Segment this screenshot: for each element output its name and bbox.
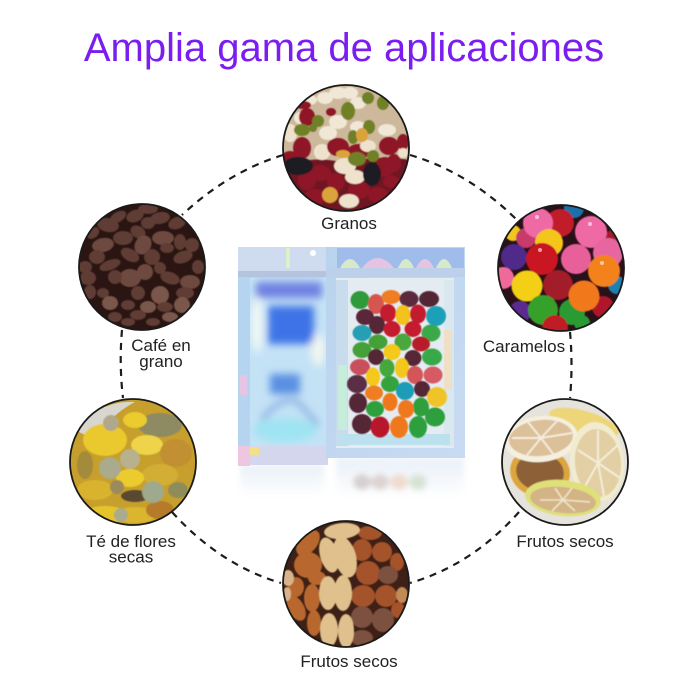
photo: rodajas de limón <box>501 398 629 526</box>
title: Amplia gama de aplicaciones <box>84 26 604 70</box>
label: caramelos: Caramelos <box>483 337 565 356</box>
ring: frutos secos <box>283 521 409 647</box>
dashed connector ring <box>121 155 571 583</box>
pouch reflection <box>240 458 464 498</box>
ring: limón <box>502 399 628 525</box>
label: café en grano: Café en <box>131 336 191 355</box>
photo: té de flores secas <box>69 398 197 526</box>
photo: café en grano <box>78 203 206 331</box>
ring: granos <box>283 85 409 211</box>
label: café en grano: grano <box>139 352 183 371</box>
front pouch <box>326 247 465 458</box>
ring: caramelos <box>498 205 624 331</box>
back pouch <box>238 247 328 466</box>
photo: frutos secos <box>282 520 410 648</box>
label: té de flores secas: secas <box>109 548 153 566</box>
ring: café <box>79 204 205 330</box>
product: holographic pouches <box>238 247 465 498</box>
photo: caramelos <box>498 206 624 330</box>
candies in window <box>347 290 447 438</box>
label: té de flores secas: Té de flores <box>86 532 176 551</box>
ring: té de flores <box>70 399 196 525</box>
label: granos: Granos <box>321 214 377 233</box>
photo: granos <box>284 86 408 210</box>
label: frutos secos: Frutos secos <box>516 532 614 551</box>
label: frutos secos inferior: Frutos secos <box>300 652 398 671</box>
